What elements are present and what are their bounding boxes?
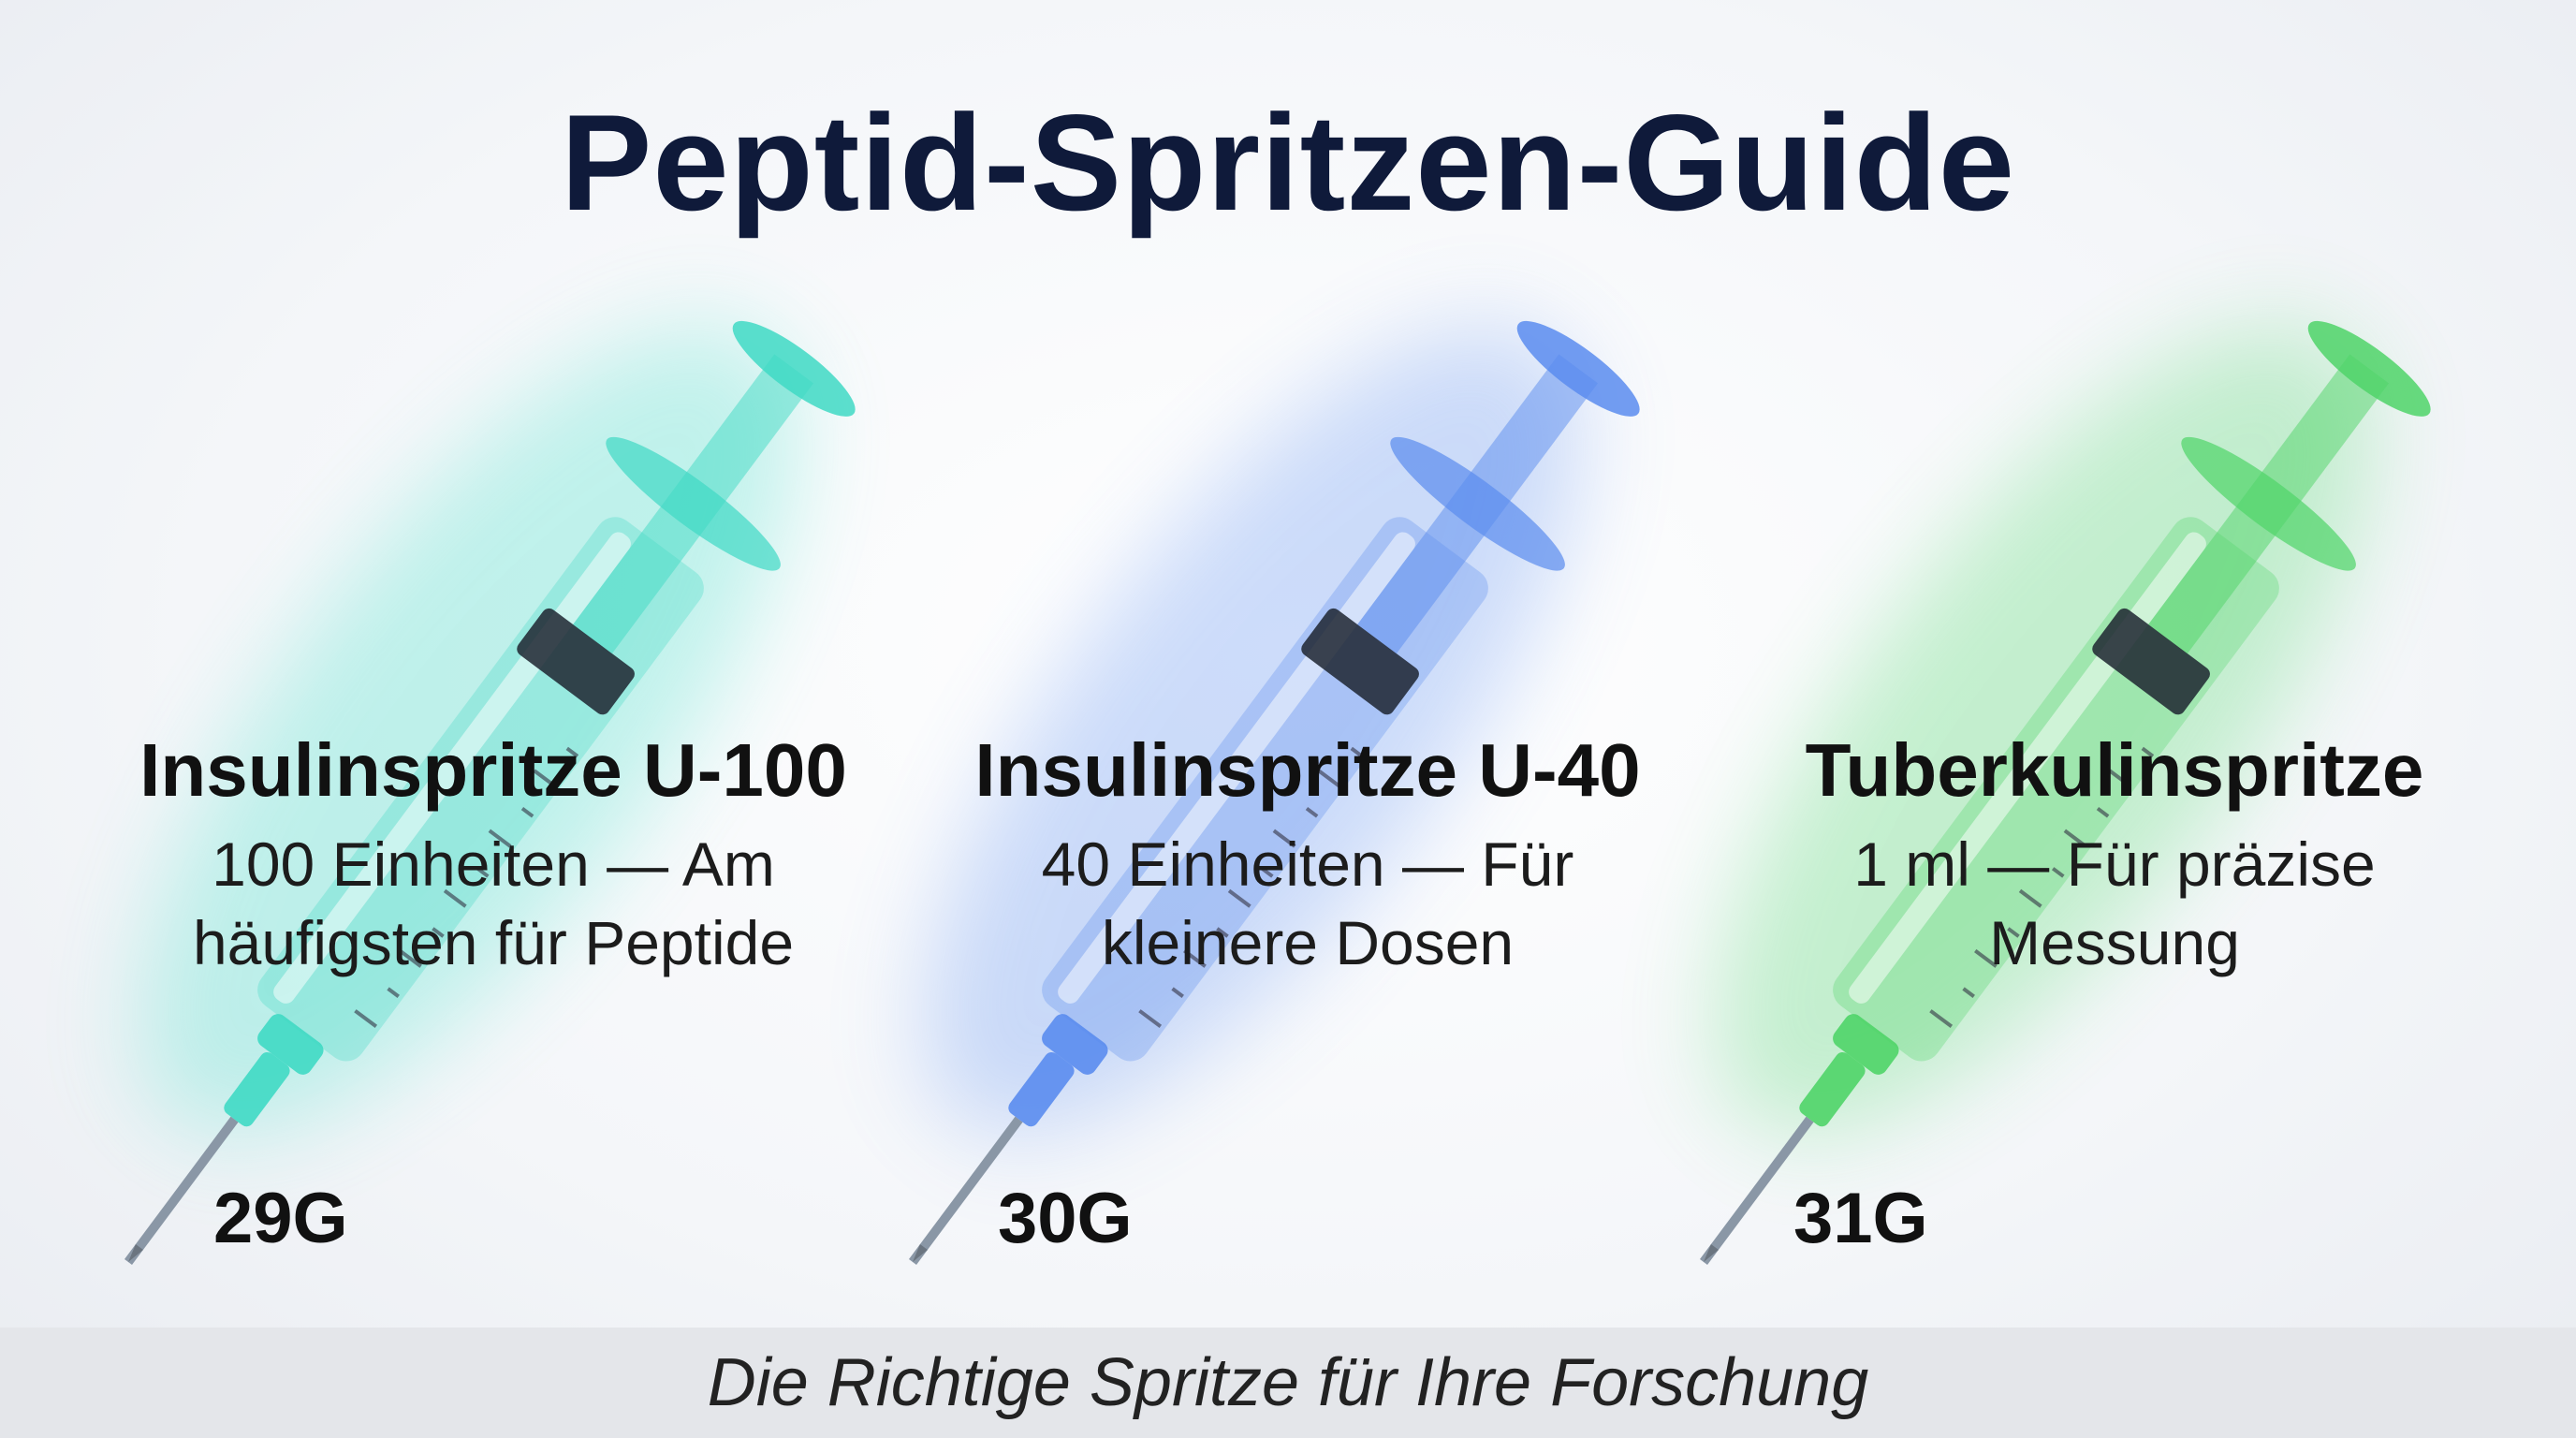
label: U-40 bbox=[974, 728, 1641, 977]
label: U-100: 100 Einheiten — Am bbox=[212, 829, 775, 899]
label: Tuberkulin: 1 ml — Für präzise bbox=[1853, 829, 2376, 899]
syringe: green bbox=[1601, 228, 2486, 1327]
label: Tuberkulin: Messung bbox=[1989, 908, 2240, 977]
footer band bbox=[0, 1328, 2576, 1438]
label: Tuberkulin: Tuberkulinspritze bbox=[1806, 728, 2423, 812]
syringe: teal bbox=[25, 228, 911, 1327]
label: U-100: häufigsten für Peptide bbox=[193, 908, 794, 977]
label: U-40: kleinere Dosen bbox=[1102, 908, 1514, 977]
gauge 31G: 31G bbox=[1793, 1179, 1928, 1258]
label: Tuberkulin bbox=[1806, 728, 2423, 977]
label: U-100: Insulinspritze U-100 bbox=[139, 728, 847, 812]
label: U-40: 40 Einheiten — Für bbox=[1042, 829, 1573, 899]
label: U-40: Insulinspritze U-40 bbox=[974, 728, 1641, 812]
label: U-100 bbox=[139, 728, 847, 977]
gauge 30G: 30G bbox=[998, 1179, 1133, 1258]
syringe: blue bbox=[810, 228, 1695, 1327]
gauge 29G: 29G bbox=[213, 1179, 348, 1258]
footer band: Die Richtige Spritze für Ihre Forschung bbox=[708, 1345, 1868, 1420]
title: Peptid-Spritzen-Guide bbox=[561, 86, 2015, 239]
